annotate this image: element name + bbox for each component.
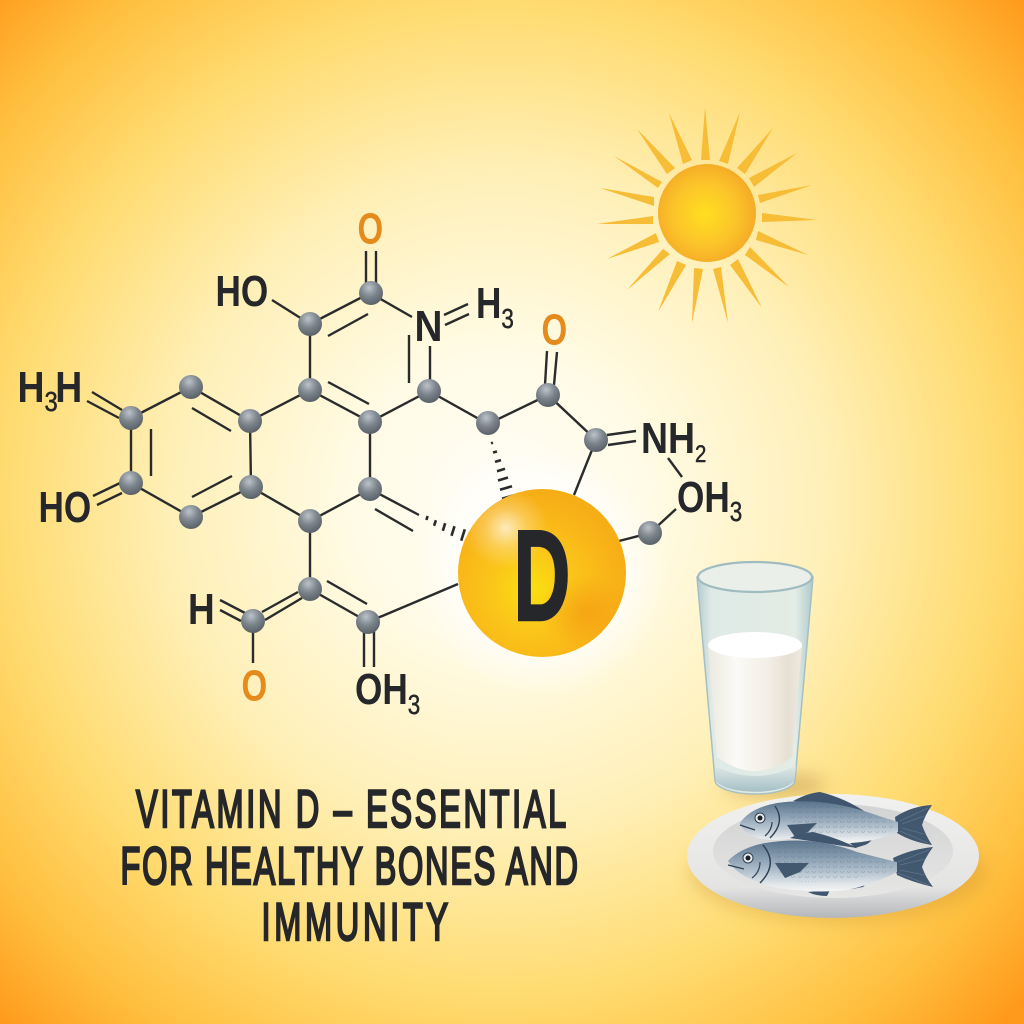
atom labels: H xyxy=(18,362,45,412)
atom labels: N xyxy=(414,301,442,351)
title: IMMUNITY xyxy=(262,893,448,952)
icon: plate of fish xyxy=(687,792,986,922)
atom labels: O xyxy=(358,205,383,254)
hashed wedge: lower xyxy=(426,516,465,541)
atom labels: OH xyxy=(355,665,408,714)
atom labels: 3 xyxy=(730,497,742,528)
atom labels: H xyxy=(188,584,215,634)
atom labels: HO xyxy=(216,267,268,316)
bonds xyxy=(87,251,682,667)
atom labels: O xyxy=(242,662,267,711)
hashed wedge: upper xyxy=(491,443,514,499)
atom labels: 2 xyxy=(695,440,706,467)
sphere glow xyxy=(417,448,667,698)
atoms xyxy=(119,281,662,634)
atom labels: OH xyxy=(677,473,730,522)
title xyxy=(120,780,578,952)
vitamin D sphere xyxy=(458,488,631,657)
title: VITAMIN D – ESSENTIAL xyxy=(136,780,566,839)
chemical structure xyxy=(18,205,742,721)
atom labels: 3 xyxy=(408,690,420,721)
atom labels: H xyxy=(55,362,82,412)
icon: sun xyxy=(597,107,817,323)
icon: glass of milk xyxy=(697,562,827,796)
atom labels: NH xyxy=(641,413,695,463)
atom labels: O xyxy=(542,306,567,355)
title: FOR HEALTHY BONES AND xyxy=(120,837,578,896)
vitamin D sphere: D xyxy=(514,503,570,648)
atom labels xyxy=(18,205,742,721)
fish top xyxy=(740,792,932,848)
atom labels: HO xyxy=(38,483,91,532)
atom labels: 3 xyxy=(45,385,58,417)
atom labels: 3 xyxy=(501,304,514,335)
atom labels: H xyxy=(476,279,501,328)
fish bottom xyxy=(728,832,933,896)
